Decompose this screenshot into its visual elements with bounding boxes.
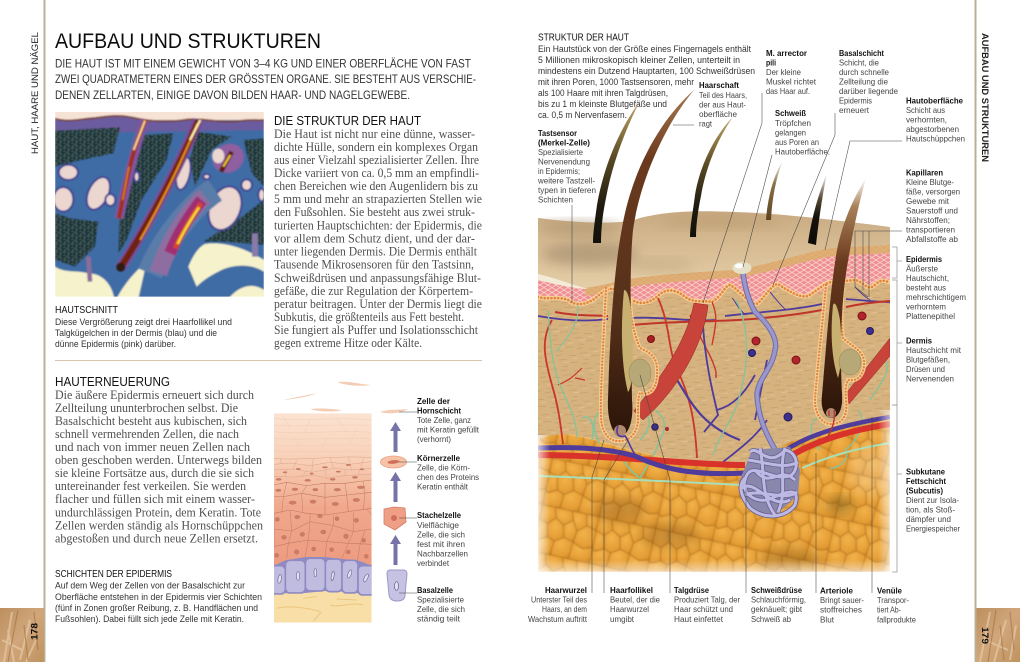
label: Basalschicht: durch schnelle (839, 67, 889, 77)
text block: Hauterneuerung: sie kleine Fortsätze aus, durch die sie sich (55, 466, 254, 480)
label: Talgdrüse: Produziert Talg, der (674, 594, 740, 604)
right running head: AUFBAU UND STRUKTUREN (980, 33, 991, 162)
label: Haarschaft: Haarschaft (699, 80, 739, 90)
icon: Basalzelle cell (387, 570, 407, 601)
label: Tastsensor: weitere Tastzell- (537, 176, 595, 186)
label: Hautoberfläche: abgestorbenen (906, 124, 959, 134)
shed flakes (283, 382, 371, 412)
label: Basalschicht: Epidermis (839, 96, 872, 106)
layer: golden band (585, 245, 890, 288)
text block: Die Struktur der Haut: Schweißdrüsen und anpassungsfähige Blut- (274, 271, 481, 285)
label: Haarfollikel (610, 585, 660, 624)
text block: Struktur der Haut (538, 32, 755, 121)
label: Tastsensor (537, 128, 596, 204)
right page margin rule (974, 0, 976, 662)
label: Subkutane Fettschicht: Fettschicht (906, 476, 946, 486)
labels: epidermis cells: Körnerzelle (417, 453, 460, 463)
labels: epidermis cells (417, 396, 480, 624)
label: Tastsensor: Tastsensor (538, 128, 578, 138)
caption: Hautschnitt: Diese Vergrößerung zeigt drei Haarfollikel und (55, 317, 232, 328)
label: Dermis: Blutgefäßen, (906, 354, 950, 364)
label: M. arrector pili: Muskel richtet (766, 76, 817, 86)
label: Tastsensor: typen in tieferen (538, 185, 596, 195)
label: Kapillaren: fäße, versorgen (906, 186, 960, 196)
label: Basalschicht (839, 48, 898, 115)
label: Kapillaren: Kleine Blutge- (906, 177, 954, 187)
sweat duct and pore (732, 262, 780, 458)
icon: Stachelzelle cell (384, 507, 406, 530)
right wood tab with page number: 179 (979, 627, 990, 644)
text block: Die Struktur der Haut: Tausende Mikrosensoren für den Tastsinn, (274, 258, 474, 272)
label: Kapillaren: Abfallstoffe ab (906, 234, 958, 244)
labels: epidermis cells: mit Keratin gefüllt (417, 424, 480, 434)
labels: epidermis cells: Spezialisierte (417, 594, 464, 604)
label: Schweiß: aus Poren an (775, 137, 819, 147)
labels: epidermis cells: chen des Proteins (417, 472, 479, 482)
text block: Hauterneuerung: abgestoßen und durch neue Zellen ersetzt. (55, 532, 258, 546)
caption: Hautschnitt (55, 305, 232, 350)
text block: Hauterneuerung: Zellteilung ununterbrochen selbst. Die (55, 401, 238, 415)
right wood tab with page number (976, 608, 1020, 662)
label: Talgdrüse: Haut einfettet (674, 614, 724, 624)
labels: epidermis cells: verbindet (417, 558, 450, 568)
label: Dermis: Dermis (906, 336, 932, 346)
label: Arteriole (820, 586, 864, 624)
labels: epidermis cells: Tote Zelle, ganz (417, 415, 471, 425)
label: Schweißdrüse: Schlauchförmig, (751, 594, 806, 604)
label: Venüle: tiert Ab- (877, 604, 901, 614)
labels: epidermis cells: fest mit ihren (417, 539, 465, 549)
label: Kapillaren: Nährstoffen; (906, 215, 950, 225)
labels: epidermis cells: Nachbarzellen (417, 548, 468, 558)
text block: Schichten der Epidermis: SCHICHTEN DER EPIDERMIS (55, 569, 172, 580)
label: Talgdrüse: Talgdrüse (674, 585, 709, 595)
label: Subkutane Fettschicht (906, 466, 960, 534)
label: Haarschaft: oberfläche (699, 109, 737, 119)
layer: basal beads (538, 280, 890, 304)
label: Dermis: Drüsen und (906, 364, 945, 374)
title: AUFBAU UND STRUKTUREN (55, 30, 321, 53)
icon: Körnerzelle cell (380, 456, 406, 468)
text block: Die Struktur der Haut: aus einer Vielzahl spezialisierter Zellen. Ihre (274, 153, 479, 167)
label: Kapillaren: transportieren (906, 224, 955, 234)
labels: epidermis cells: Hornschicht (417, 406, 461, 416)
label: Haarfollikel: Haarfollikel (610, 585, 653, 595)
micrograph: skin section (53, 110, 265, 299)
text block: Die Struktur der Haut: chen Bereichen wie den Augenlidern bis zu (274, 179, 478, 193)
hair: small far left (593, 101, 640, 243)
text block: Die Struktur der Haut (274, 113, 482, 350)
intro text (55, 58, 476, 102)
hair: small dark (808, 173, 827, 245)
label: Epidermis: Hautschicht, (906, 273, 949, 283)
layer: dermis (538, 270, 890, 466)
label: Kapillaren: Sauerstoff und (906, 206, 958, 216)
text block: Hauterneuerung: Zellen werden ständig als Hornschüppchen (55, 518, 263, 532)
label: Schweiß: gelangen (775, 128, 806, 138)
text block: Die Struktur der Haut: Die Haut ist nicht nur eine dünne, wasser- (274, 127, 475, 141)
label: Basalschicht: darüber liegende (839, 86, 898, 96)
label: Talgdrüse (674, 585, 740, 624)
label: Subkutane Fettschicht: dämpfer und (906, 514, 951, 524)
edge fades (538, 410, 890, 572)
arrow up 2 (390, 472, 401, 502)
intro text: ZWEI QUADRATMETERN EINES DER GRÖSSTEN ORGANE. SIE BESTEHT AUS VERSCHIE- (55, 73, 476, 86)
sweat gland coil (739, 447, 800, 518)
dermis vessels (538, 287, 890, 478)
text block: Hauterneuerung: undurchlässigen Protein, dem Keratin. Tote (55, 506, 261, 520)
layer: epidermis pink (538, 245, 890, 304)
vessel dots (648, 312, 874, 431)
text block: Hauterneuerung: Basalschicht besteht aus kubischen, sich (55, 414, 247, 428)
label: Schweißdrüse: Schweißdrüse (751, 585, 802, 595)
label: Arteriole: Blut (820, 614, 835, 624)
text block: Hauterneuerung: untereinander fest verkeilen. Sie werden (55, 479, 246, 493)
text block: Die Struktur der Haut: vor allem dem Schutz dient, und der dar- (274, 232, 475, 246)
label: Arteriole: Arteriole (820, 586, 853, 596)
layer: fat (538, 410, 890, 572)
text block: Struktur der Haut: mit ihren Poren, 1000 Tastsensoren, mehr (538, 77, 695, 88)
text block: Die Struktur der Haut: den Fußsohlen. Sie besteht aus zwei struk- (274, 205, 475, 219)
label: Epidermis: besteht aus (906, 282, 946, 292)
text block: Die Struktur der Haut: Dicke variiert von ca. 0,5 mm an empfindli- (274, 166, 479, 180)
label: Venüle: Venüle (877, 586, 902, 596)
label: Schweißdrüse (751, 585, 806, 624)
text block: Schichten der Epidermis: Oberfläche entstehen in der Epidermis vier Schichten (55, 592, 262, 603)
labels: epidermis cells: Zelle, die sich (417, 530, 465, 540)
text block: Schichten der Epidermis: Auf dem Weg der Zellen von der Basalschicht zur (55, 580, 246, 592)
text block: Struktur der Haut: Ein Hautstück von der Größe eines Fingernagels enthält (538, 44, 751, 55)
cell column (274, 413, 372, 622)
text block: Die Struktur der Haut: DIE STRUKTUR DER HAUT (274, 113, 421, 128)
labels: epidermis cells: Zelle, die sich (417, 604, 465, 614)
label: Kapillaren (906, 168, 960, 244)
label: Haarschaft: der aus Haut- (699, 100, 746, 110)
label: Hautoberfläche (906, 96, 965, 144)
label: Haarschaft: Teil des Haars, (699, 90, 747, 100)
arrow up 3 (390, 535, 401, 565)
label: Haarfollikel: Haarwurzel (610, 604, 649, 614)
labels: epidermis cells: Basalzelle (417, 585, 453, 595)
diagram: epidermis layers (274, 382, 372, 622)
text block: Struktur der Haut: als 100 Haare mit ihren Talgdrüsen, (538, 88, 668, 99)
hair: small centre (690, 117, 733, 237)
label: Schweiß: Hautoberfläche. (775, 146, 830, 156)
intro text: DIE HAUT IST MIT EINEM GEWICHT VON 3–4 KG UND EINER OBERFLÄCHE VON FAST (55, 58, 471, 70)
label: M. arrector pili: das Haar auf. (766, 86, 810, 96)
label: Hautoberfläche: Hautschüppchen (906, 134, 965, 144)
label: Venüle (877, 586, 916, 624)
label: Basalschicht: Zellteilung die (839, 76, 888, 86)
caption: Hautschnitt: HAUTSCHNITT (55, 305, 118, 316)
label: Basalschicht: Basalschicht (839, 48, 884, 58)
text block: Hauterneuerung: HAUTERNEUERUNG (55, 374, 170, 389)
follicle 2 (815, 283, 864, 424)
hair: large left (608, 90, 694, 458)
arrow up 1 (390, 422, 401, 452)
label: Epidermis: Äußerste (906, 264, 938, 274)
label: Arteriole: stoffreiches (820, 604, 862, 614)
label: Kapillaren: Gewebe mit (906, 196, 950, 206)
left wood tab with page number: 178 (30, 623, 40, 640)
text block: Struktur der Haut: ca. 0,5 m Nervenfasern. (538, 110, 627, 121)
label: M. arrector pili: M. arrector (766, 48, 808, 58)
label: Haarwurzel: Wachstum auftritt (528, 614, 588, 624)
left page margin rule (44, 0, 46, 662)
labels: epidermis cells: Keratin enthält (417, 482, 469, 492)
hair: small light (766, 160, 783, 220)
label: Epidermis: mehrschichtigem (906, 292, 966, 302)
label: Epidermis: Plattenepithel (906, 311, 955, 321)
text block: Hauterneuerung: oben geschoben werden. Unterwegs bilden (55, 453, 262, 467)
label: Dermis: Hautschicht mit (906, 345, 962, 355)
label: Epidermis: Epidermis (906, 254, 942, 264)
text block: Die Struktur der Haut: turierten Hauptschichten: der Epidermis, die (274, 218, 482, 232)
caption: Hautschnitt: dünne Epidermis (pink) darüber. (55, 339, 176, 350)
labels: epidermis cells: ständig teilt (417, 614, 461, 624)
main vessels (538, 417, 890, 485)
label: Schweißdrüse: Schweiß ab (751, 614, 791, 624)
arrector muscles (634, 303, 890, 420)
label: Schweiß: Schweiß (775, 108, 806, 118)
label: Subkutane Fettschicht: Subkutane (906, 466, 945, 476)
text block: Schichten der Epidermis: Fußsohlen). Dabei füllt sich jede Zelle mit Keratin. (55, 614, 244, 625)
text block: Schichten der Epidermis: (fünf in Zonen großer Reibung, z. B. Handflächen und (55, 603, 258, 614)
label: Venüle: fallprodukte (877, 614, 916, 624)
label: Schweiß: Tröpfchen (775, 118, 811, 128)
label: Tastsensor: Spezialisierte (538, 147, 583, 157)
label: Haarschaft: ragt (699, 118, 713, 128)
label: Hautoberfläche: verhornten, (906, 114, 947, 124)
label: Tastsensor: (Merkel-Zelle) (538, 138, 590, 148)
label: Schweiß (775, 108, 830, 156)
left running head: HAUT, HAARE UND NÄGEL (29, 32, 40, 154)
label: Dermis: Nervenenden (906, 374, 954, 384)
label: Hautoberfläche: Schicht aus (906, 105, 945, 115)
label: Tastsensor: Nervenendung (538, 156, 590, 166)
label: Haarwurzel: Unterster Teil des (531, 594, 587, 604)
label: Talgdrüse: Haar schützt und (674, 604, 733, 614)
labels: epidermis cells: (verhornt) (417, 434, 451, 444)
hair: large right (822, 178, 866, 440)
label: Tastsensor: in Epidermis; (538, 166, 580, 176)
text block: Hauterneuerung: und nach von immer neuen Zellen nach (55, 440, 250, 454)
label: Epidermis: verhorntem (906, 302, 946, 312)
labels: epidermis cells: Zelle der (417, 396, 451, 406)
illustration: skin cross-section (538, 90, 890, 572)
text block: Die Struktur der Haut: unter liegenden Dermis. Die Dermis enthält (274, 244, 478, 258)
label: Haarwurzel: Haarwurzel (545, 585, 587, 595)
label: Haarfollikel: Beutel, der die (610, 594, 660, 604)
text block: Struktur der Haut: 5 Millionen mikroskopisch kleiner Zellen, unterteilt in (538, 55, 740, 66)
label: Basalschicht: erneuert (839, 105, 870, 115)
label: M. arrector pili: Der kleine (766, 67, 801, 77)
text block: Die Struktur der Haut: 5 mm und mehr an strapazierten Stellen wie (274, 192, 482, 206)
text block: Die Struktur der Haut: Sie fungiert als Puffer und Isolationsschicht (274, 323, 479, 337)
label: Basalschicht: Schicht, die (839, 58, 879, 68)
follicle 1 (601, 288, 657, 441)
text block: Die Struktur der Haut: dichte Hülle, sondern ein komplexes Organ (274, 140, 478, 154)
text block: Struktur der Haut: bis zu 1 m kleinste Blutgefäße und (538, 99, 667, 110)
layer: surface (538, 211, 890, 289)
label: M. arrector pili (766, 48, 817, 96)
label: Kapillaren: Kapillaren (906, 168, 943, 178)
text block: Die Struktur der Haut: peratur beitragen. Unter der Dermis liegt die (274, 297, 482, 311)
label: Haarschaft (699, 80, 747, 128)
left wood tab with page number (0, 608, 44, 662)
layer brackets (892, 247, 902, 572)
label: Venüle: Transpor- (877, 595, 909, 605)
label: Subkutane Fettschicht: Energiespeicher (906, 524, 960, 534)
label: Haarfollikel: umgibt (610, 614, 635, 624)
text block: Die Struktur der Haut: Subkutis, die größtenteils aus Fett besteht. (274, 310, 464, 324)
caption: Hautschnitt: Talgkügelchen in der Dermis (blau) und die (55, 328, 217, 339)
label: Tastsensor: Schichten (538, 194, 573, 204)
icon: Hornschicht cell (380, 409, 408, 413)
label: Subkutane Fettschicht: Dient zur Isola- (906, 495, 959, 505)
text block: Struktur der Haut: STRUKTUR DER HAUT (538, 32, 629, 44)
labels: epidermis cells: Stachelzelle (417, 510, 461, 520)
label: Subkutane Fettschicht: (Subcutis) (906, 486, 943, 496)
label: M. arrector pili: pili (766, 58, 776, 68)
text block: Hauterneuerung: schnell vermehrenden Zellen, die nach (55, 427, 239, 441)
intro text: DENEN ZELLARTEN, EINIGE DAVON BILDEN HAAR- UND NAGELGEWEBE. (55, 89, 410, 102)
label: Schweißdrüse: geknäuelt; gibt (751, 604, 803, 614)
label: Arteriole: Bringt sauer- (820, 595, 864, 605)
labels: epidermis cells: Zelle, die Körn- (417, 462, 470, 472)
label: Haarwurzel: Haars, an dem (542, 604, 587, 614)
labels: epidermis cells: Vielflächige (417, 520, 459, 530)
text block: Hauterneuerung (55, 374, 263, 546)
text block: Die Struktur der Haut: gegen extreme Hitze oder Kälte. (274, 336, 422, 350)
leader lines (572, 93, 902, 593)
text block: Hauterneuerung: flacher und füllen sich mit einem wasser- (55, 492, 255, 506)
text block: Schichten der Epidermis (55, 569, 262, 625)
text block: Hauterneuerung: Die äußere Epidermis erneuert sich durch (55, 388, 254, 402)
label: Subkutane Fettschicht: tion, als Stoß- (906, 504, 955, 514)
label: Hautoberfläche: Hautoberfläche (906, 96, 963, 106)
label: Epidermis (906, 254, 966, 321)
label: Dermis (906, 336, 962, 384)
text block: Die Struktur der Haut: gefäße, die zur Regulation der Körpertem- (274, 284, 473, 298)
label: Haarwurzel (528, 585, 588, 624)
text block: Struktur der Haut: mindestens ein Dutzend Hauptarten, 100 Schweißdrüsen (538, 66, 755, 77)
